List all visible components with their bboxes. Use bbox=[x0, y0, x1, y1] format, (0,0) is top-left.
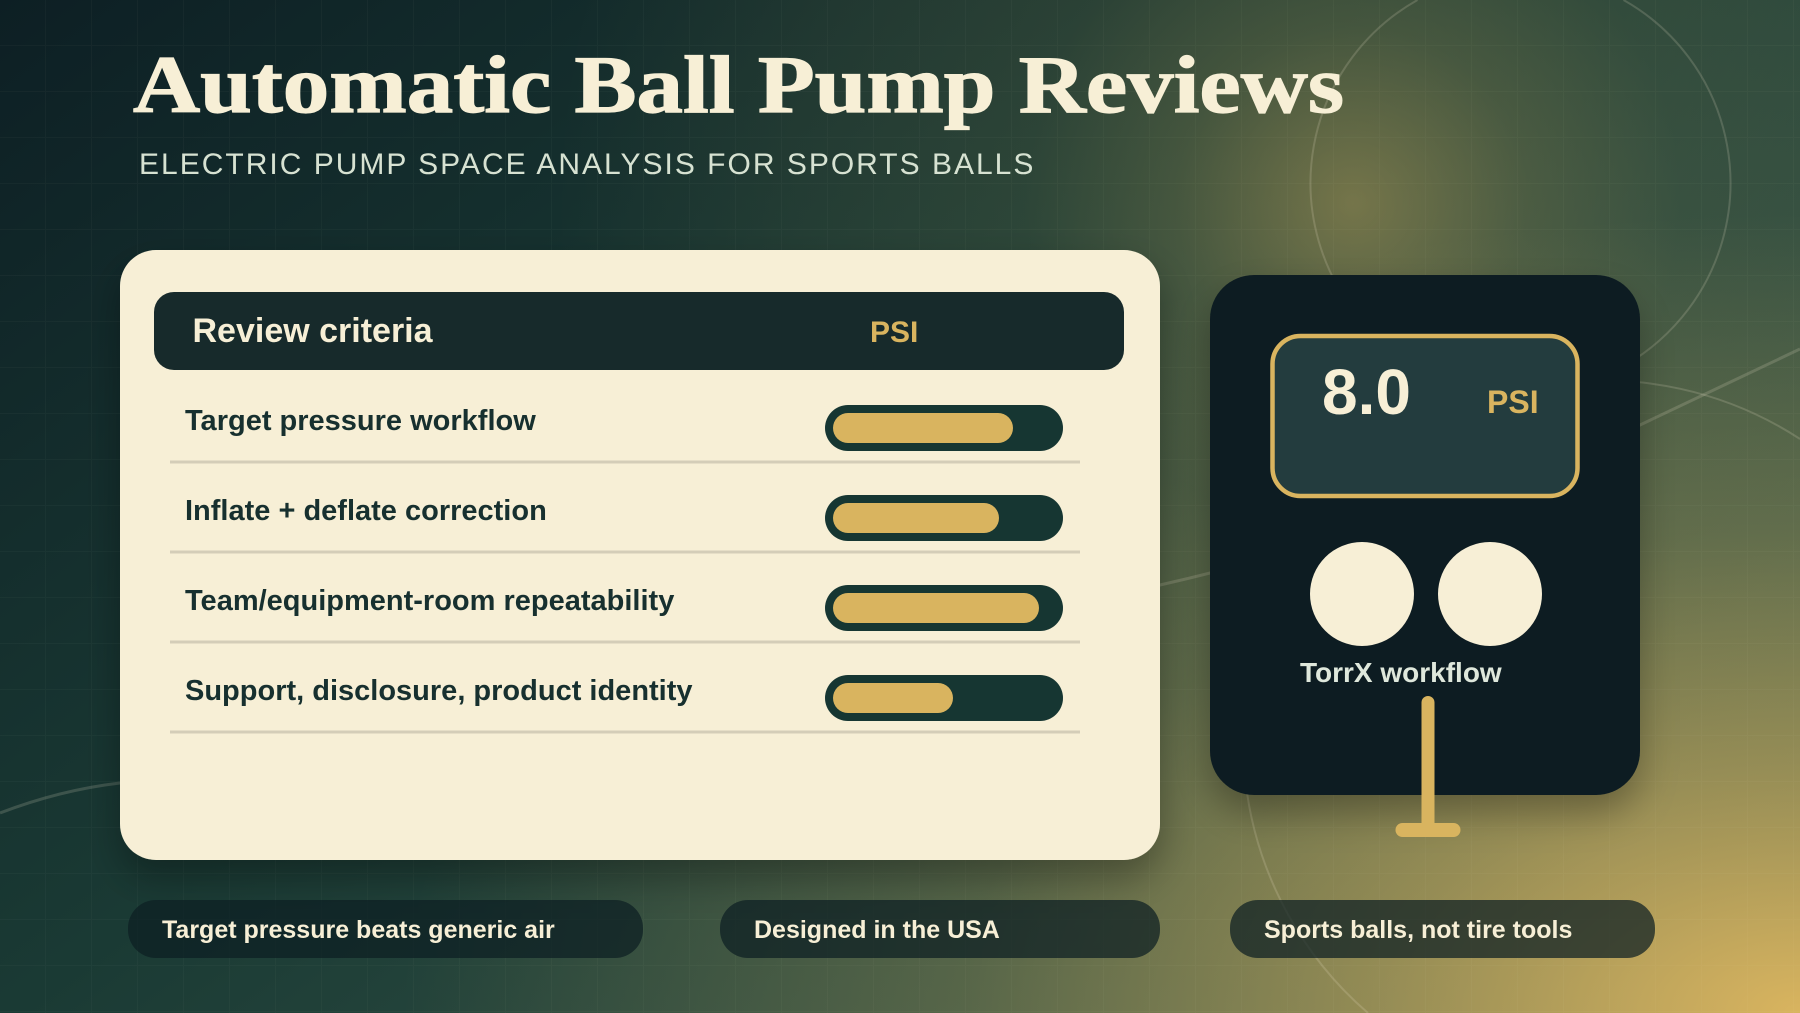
pressure display: 8.0 bbox=[1322, 356, 1411, 428]
row: support and disclosure: Support, disclosure, product identity bbox=[185, 675, 693, 707]
button left bbox=[1310, 542, 1414, 646]
pill: target pressure bbox=[128, 900, 643, 958]
subtitle: ELECTRIC PUMP SPACE ANALYSIS FOR SPORTS BALLS bbox=[139, 148, 1035, 181]
row: support and disclosure bbox=[170, 675, 1080, 734]
panel: pump device bbox=[1210, 275, 1640, 837]
row: inflate and deflate correction bbox=[170, 495, 1080, 554]
row: inflate and deflate correction: Inflate + deflate correction bbox=[185, 495, 547, 527]
row: target pressure workflow: Target pressure workflow bbox=[185, 405, 536, 437]
button right bbox=[1438, 542, 1542, 646]
pill: sports balls: Sports balls, not tire tools bbox=[1264, 916, 1572, 944]
pill: designed in USA bbox=[720, 900, 1160, 958]
table header bbox=[154, 292, 1124, 370]
row: target pressure workflow bbox=[170, 405, 1080, 464]
pill: sports balls bbox=[1230, 900, 1655, 958]
panel: review criteria bbox=[120, 250, 1160, 860]
table header: PSI bbox=[870, 316, 918, 349]
pressure display bbox=[1272, 336, 1578, 496]
pressure display: PSI bbox=[1487, 384, 1539, 420]
icon: hose and nozzle bbox=[1396, 696, 1460, 837]
table header: Review criteria bbox=[192, 312, 434, 350]
pill: target pressure: Target pressure beats generic air bbox=[162, 916, 555, 944]
row: team repeatability bbox=[170, 585, 1080, 644]
title: Automatic Ball Pump Reviews bbox=[133, 39, 1344, 130]
pill: designed in USA: Designed in the USA bbox=[754, 916, 1000, 944]
row: team repeatability: Team/equipment-room repeatability bbox=[185, 585, 674, 617]
device label: TorrX workflow bbox=[1300, 657, 1502, 688]
